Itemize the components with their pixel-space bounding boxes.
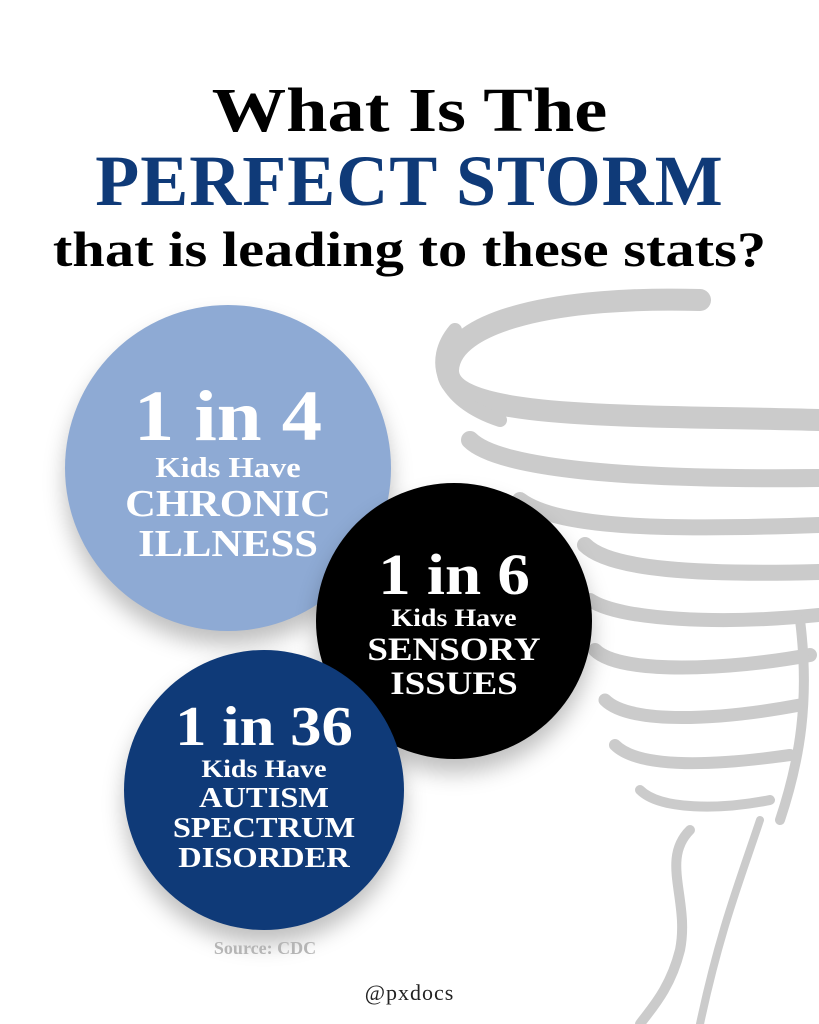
title: that is leading to these stats? — [53, 221, 766, 277]
circle: autism: DISORDER — [178, 842, 350, 874]
title — [53, 77, 766, 277]
circle: sensory issues: 1 in 6 — [378, 542, 530, 607]
circle: chronic illness — [65, 305, 391, 631]
circle: sensory issues: SENSORY — [367, 632, 541, 668]
circle: autism: 1 in 36 — [175, 696, 353, 758]
circle: chronic illness: ILLNESS — [138, 523, 318, 565]
circle: sensory issues: Kids Have — [391, 605, 517, 632]
circle: chronic illness: Kids Have — [155, 452, 301, 484]
circle: sensory issues — [316, 483, 592, 759]
circle: chronic illness: CHRONIC — [125, 483, 331, 525]
circle: sensory issues: ISSUES — [390, 666, 518, 702]
source: Source: CDC — [214, 938, 316, 958]
circle: autism: Kids Have — [201, 756, 327, 783]
circle: autism: SPECTRUM — [173, 812, 355, 844]
title: What Is The — [212, 77, 607, 145]
handle: @pxdocs — [365, 980, 454, 1005]
circle: autism: AUTISM — [199, 782, 329, 814]
circle: chronic illness: 1 in 4 — [134, 376, 322, 456]
circle: autism — [124, 650, 404, 930]
title: PERFECT STORM — [95, 141, 724, 221]
